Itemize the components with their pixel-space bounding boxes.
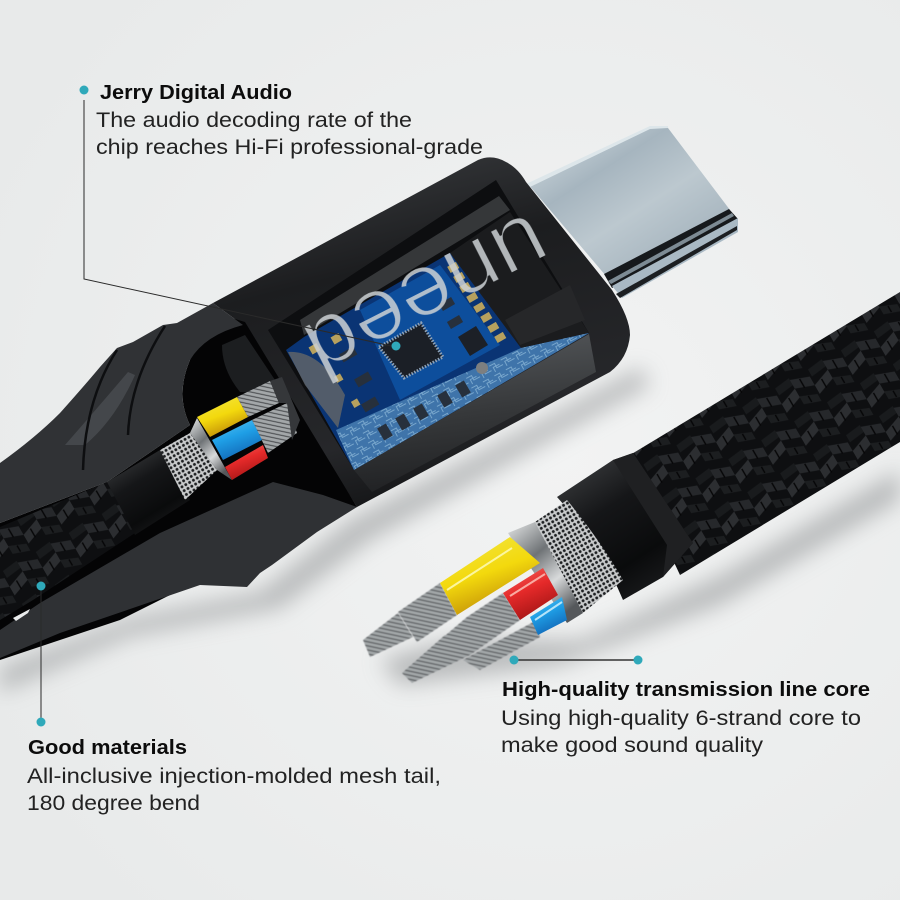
- left collar: [107, 450, 190, 535]
- left yellow sleeve: [197, 397, 248, 437]
- heading: Good materials: [28, 737, 187, 759]
- rear chamber: [450, 212, 589, 350]
- heading: Jerry Digital Audio: [100, 82, 292, 104]
- callout: transmission line core: [501, 656, 870, 757]
- description: The audio decoding rate of the: [96, 109, 412, 132]
- left tail: sheen: [65, 372, 135, 445]
- right strands: [363, 583, 540, 683]
- leader line: [514, 659, 638, 661]
- right braided cable: [625, 292, 900, 575]
- main chip: [379, 323, 443, 378]
- left braided cable: [0, 482, 135, 620]
- start dot: [80, 86, 88, 94]
- start dot: [510, 656, 518, 664]
- heading: High-quality transmission line core: [502, 679, 870, 701]
- leader line: [84, 100, 396, 347]
- end dot: [392, 342, 400, 350]
- description: Using high-quality 6-strand core to: [501, 707, 861, 730]
- right collar: [557, 453, 693, 600]
- right blue sleeve: [530, 597, 567, 635]
- leader line: [40, 590, 42, 718]
- right collar ridge: [613, 453, 693, 577]
- callout: Good materials: 180 degree bend: [27, 792, 200, 815]
- right silver ring: [508, 522, 583, 623]
- left blue sleeve: [212, 420, 262, 460]
- left tail: grooves: [83, 326, 165, 470]
- plug housing: [213, 157, 630, 507]
- callout: Jerry Digital Audio: [80, 82, 483, 350]
- left silver ring: [190, 418, 232, 480]
- left tail: lower overmold: [0, 482, 357, 658]
- circuit board: [286, 253, 589, 470]
- lower glass band: [354, 334, 596, 492]
- white gap in tail: [13, 609, 30, 621]
- gold pads: [309, 262, 506, 408]
- callout: Good materials: [27, 582, 441, 815]
- start dot: [36, 582, 46, 590]
- small components: [339, 297, 471, 441]
- left tail: interior cone: [222, 335, 285, 395]
- right mesh shield: [535, 500, 623, 613]
- drop shadows: [0, 368, 900, 692]
- callout: transmission line core: make good sound quality: [501, 734, 764, 757]
- window upper grey band: [300, 196, 510, 335]
- USB-C connector: [526, 126, 738, 298]
- right red sleeve: [503, 568, 558, 620]
- secondary chip: [458, 326, 488, 356]
- capacitor: [476, 362, 488, 374]
- logo: uneed: [288, 193, 567, 401]
- callout: Jerry Digital Audio: chip reaches Hi-Fi professional-grade: [96, 136, 483, 159]
- left tail: upper overmold: [0, 303, 243, 523]
- end dot: [36, 718, 46, 726]
- right yellow sleeve: [440, 537, 540, 615]
- description: All-inclusive injection-molded mesh tail,: [27, 765, 441, 788]
- left tail: dark interior: [0, 310, 357, 660]
- inner window: [268, 180, 589, 470]
- end dot: [634, 656, 642, 664]
- left mesh shield: [160, 433, 217, 500]
- left red sleeve: [225, 445, 268, 480]
- left strands: [237, 377, 300, 453]
